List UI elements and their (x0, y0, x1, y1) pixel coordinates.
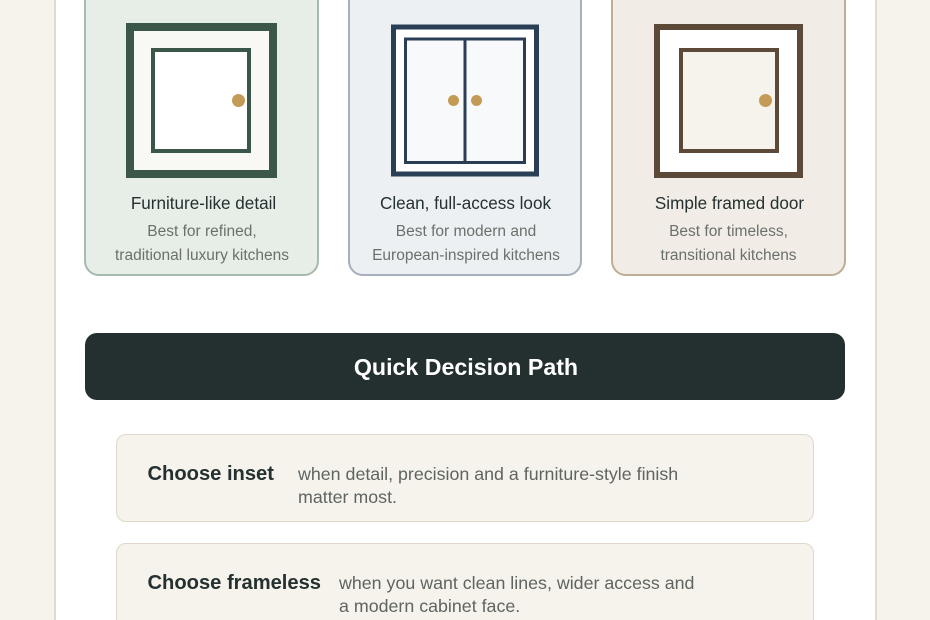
icon: frameless door (391, 24, 539, 176)
panel: choose inset (116, 434, 814, 522)
inset door description: traditional luxury kitchens (115, 246, 289, 264)
frameless door title: Clean, full-access look (380, 194, 551, 213)
icon: inset door (126, 23, 277, 178)
panel: frameless door (348, 0, 582, 276)
choose frameless label: Choose frameless (148, 572, 321, 594)
choose frameless description: a modern cabinet face. (339, 596, 520, 616)
framed door description (660, 223, 797, 264)
choose frameless description: when you want clean lines, wider access and (339, 572, 694, 592)
panel: inset door (84, 0, 319, 276)
choose inset label: Choose inset (148, 462, 274, 484)
door panel (151, 48, 251, 153)
door panel (678, 48, 778, 153)
panel: choose frameless (116, 542, 814, 620)
icon: inset door knob (232, 94, 245, 107)
choose inset description (298, 464, 678, 507)
choose frameless description (339, 572, 694, 616)
framed door description: transitional kitchens (660, 246, 797, 264)
panel: framed door (611, 0, 846, 276)
frameless door description: European-inspired kitchens (372, 246, 560, 264)
choose inset description: when detail, precision and a furniture-style finish (298, 464, 678, 484)
frameless door description (372, 223, 560, 264)
framed door description: Best for timeless, (669, 223, 788, 240)
inset door title: Furniture-like detail (131, 194, 276, 213)
icon: right knob (471, 95, 482, 106)
icon: framed door (654, 24, 803, 178)
inset door description: Best for refined, (147, 223, 257, 240)
icon: framed door knob (759, 94, 772, 107)
icon: left knob (448, 95, 459, 106)
choose inset description: matter most. (298, 487, 397, 507)
heading: quick decision path: Quick Decision Path (354, 354, 578, 380)
heading: quick decision path (85, 333, 845, 400)
inset door description (115, 223, 289, 264)
frameless door description: Best for modern and (396, 223, 536, 240)
framed door title: Simple framed door (655, 194, 804, 213)
